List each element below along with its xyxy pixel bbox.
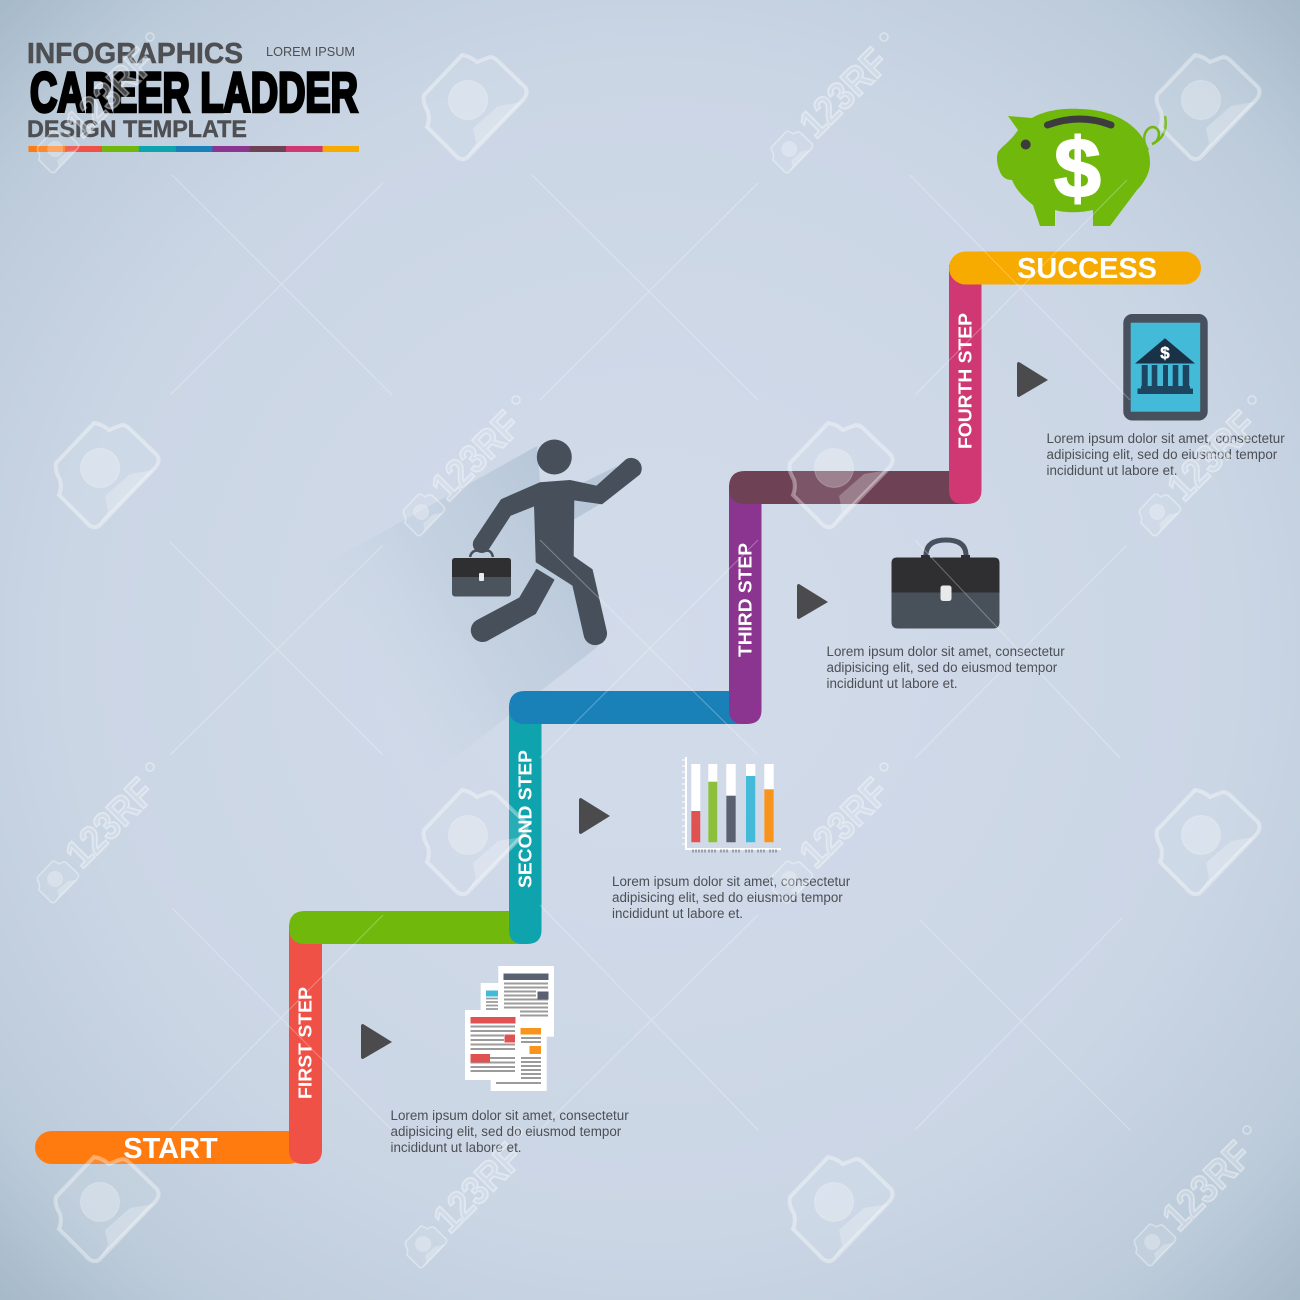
text: second step — [612, 874, 851, 921]
bar: first step — [289, 925, 322, 1164]
text: third step: incididunt ut labore et. — [826, 676, 958, 691]
title block — [27, 38, 359, 152]
subheading: lorem ipsum: LOREM IPSUM — [266, 44, 355, 59]
chart: bar chart icon — [682, 757, 781, 851]
bar: blue connector — [509, 691, 745, 724]
text: first step: adipisicing elit, sed do eiusmod tempor — [390, 1124, 622, 1139]
icon: piggy bank — [997, 109, 1166, 226]
text: first step: incididunt ut labore et. — [390, 1140, 522, 1155]
watermarks: 123RF — [791, 40, 897, 146]
bar: fourth step — [949, 265, 982, 504]
text: third step: Lorem ipsum dolor sit amet, consectetur — [826, 644, 1065, 659]
icon: tablet with bank — [1123, 314, 1208, 420]
runner long shadow — [300, 446, 617, 800]
figure: running businessman — [452, 440, 641, 644]
bar: first step: FIRST STEP — [294, 987, 316, 1099]
watermarks: 123RF — [1154, 1133, 1260, 1239]
arrow: second step — [579, 798, 610, 834]
bar: fourth step: FOURTH STEP — [954, 313, 976, 449]
bar: start: START — [123, 1133, 218, 1165]
torso and front leg — [474, 459, 641, 644]
text: fourth step: incididunt ut labore et. — [1046, 463, 1178, 478]
colour strip — [28, 146, 359, 152]
icon: small briefcase — [452, 551, 511, 596]
text: third step: adipisicing elit, sed do eiusmod tempor — [826, 660, 1058, 675]
bar: success — [949, 252, 1201, 285]
watermarks: 123RF — [423, 403, 529, 509]
heading: infographics: INFOGRAPHICS — [27, 38, 243, 70]
head — [537, 440, 572, 474]
back leg — [472, 570, 553, 641]
text: first step — [390, 1108, 629, 1155]
text: fourth step: Lorem ipsum dolor sit amet, consectetur — [1046, 431, 1285, 446]
watermarks: 123RF — [791, 770, 897, 876]
text: first step: Lorem ipsum dolor sit amet, consectetur — [390, 1108, 629, 1123]
arrow: third step — [797, 584, 828, 619]
text: fourth step — [1046, 431, 1285, 478]
watermarks: 123RF — [57, 770, 163, 876]
watermarks: 123RF — [1159, 403, 1265, 509]
bar: third step — [729, 485, 762, 724]
watermarks: 123RF — [57, 40, 163, 146]
text: second step: adipisicing elit, sed do eiusmod tempor — [612, 890, 843, 905]
text: fourth step: adipisicing elit, sed do eiusmod tempor — [1046, 447, 1278, 462]
bar: maroon connector — [729, 471, 965, 504]
text: third step — [826, 644, 1065, 691]
heading: design template: DESIGN TEMPLATE — [27, 116, 247, 143]
icon: documents — [465, 966, 554, 1091]
text: second step: incididunt ut labore et. — [612, 906, 743, 921]
icon: piggy bank: $ — [1054, 121, 1101, 215]
arrow: fourth step — [1017, 362, 1048, 397]
text: second step: Lorem ipsum dolor sit amet, consectetur — [612, 874, 851, 889]
bar: second step: SECOND STEP — [514, 750, 536, 888]
icon: tablet with bank: $ — [1160, 344, 1170, 362]
heading: career ladder: CAREER LADDER — [30, 60, 358, 124]
icon: briefcase — [892, 540, 1000, 628]
arrow: first step — [361, 1024, 392, 1059]
watermarks: 123RF — [425, 1135, 531, 1241]
career ladder path — [35, 252, 1201, 1165]
bar: success: SUCCESS — [1017, 253, 1157, 285]
bar: second step — [509, 705, 542, 944]
bar: start — [35, 1131, 305, 1165]
bar: third step: THIRD STEP — [734, 543, 756, 657]
bar: green connector — [289, 911, 525, 944]
